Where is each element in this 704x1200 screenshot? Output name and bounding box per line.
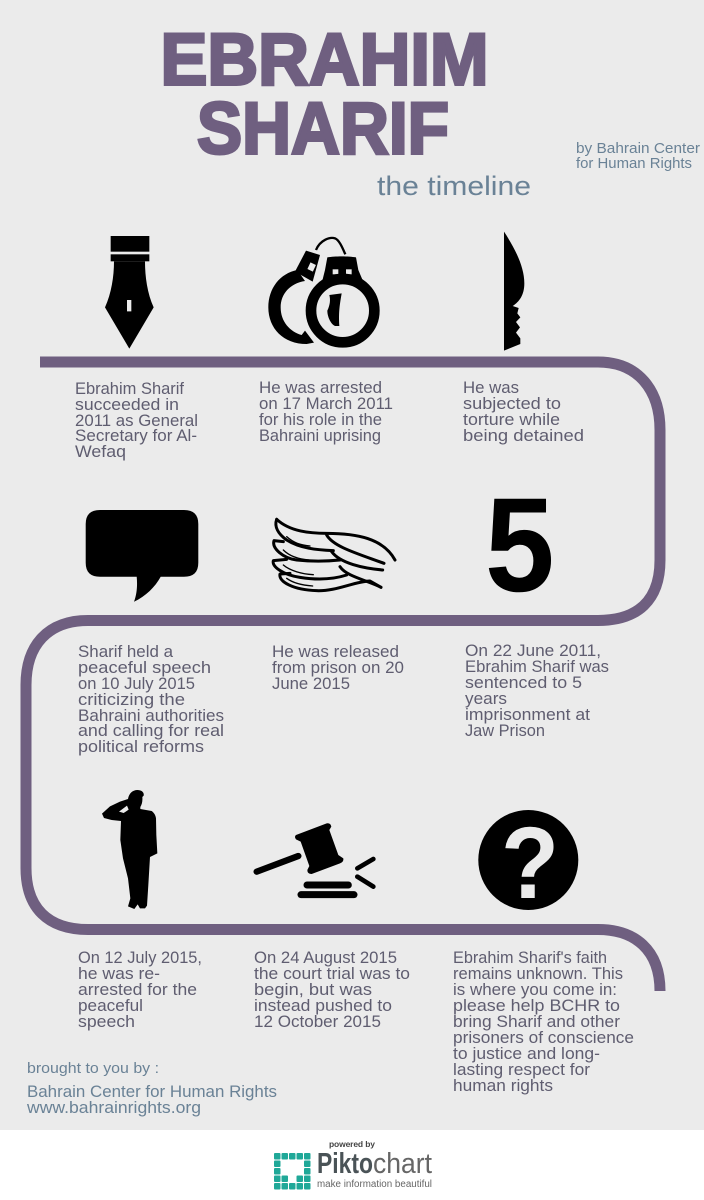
byline: for Human Rights: [576, 155, 692, 172]
text: succeeded as General Secretary: 2011 as General: [75, 411, 198, 430]
text: succeeded as General Secretary: succeeded in: [75, 395, 179, 414]
timeline path: [26, 362, 660, 991]
icon: fountain pen nib: [105, 236, 154, 349]
icon: knife: [504, 232, 524, 351]
text: call to action: is where you come in:: [453, 980, 617, 999]
piktochart wordmark: Pikto: [317, 1148, 373, 1180]
title: EBRAHIM: [160, 20, 488, 100]
text: peaceful speech: peaceful speech: [78, 658, 211, 677]
text: re-arrested: speech: [78, 1012, 135, 1031]
text: call to action: to justice and long-: [453, 1044, 600, 1063]
icon: handcuffs: [268, 238, 374, 344]
text: arrested: He was arrested: [259, 378, 382, 397]
text: call to action: please help BCHR to: [453, 996, 620, 1015]
text: call to action: lasting respect for: [453, 1060, 590, 1079]
footer credit: [26, 1060, 277, 1117]
text: peaceful speech: political reforms: [78, 737, 204, 756]
text: released: June 2015: [272, 674, 350, 693]
icon: number 5: 5: [485, 471, 554, 620]
text: sentenced: Jaw Prison: [465, 721, 545, 740]
title: SHARIF: [197, 88, 449, 170]
icon: question mark: ?: [501, 806, 559, 920]
icon: question mark: [478, 806, 578, 920]
text: court trial: begin, but was: [254, 980, 372, 999]
text: arrested: for his role in the: [259, 410, 382, 429]
text: call to action: prisoners of conscience: [453, 1028, 634, 1047]
text: court trial: 12 October 2015: [254, 1012, 381, 1031]
text: re-arrested: he was re-: [78, 964, 160, 983]
footer credit: www.bahrainrights.org: [26, 1099, 201, 1117]
text: court trial: On 24 August 2015: [254, 948, 397, 967]
text: torture: He was: [463, 378, 519, 397]
text: sentenced: On 22 June 2011,: [465, 641, 601, 660]
icon: speech bubble: [86, 510, 198, 602]
text: call to action: bring Sharif and other: [453, 1012, 620, 1031]
footer credit: Bahrain Center for Human Rights: [27, 1083, 277, 1101]
icon: gavel: [257, 823, 373, 895]
text: released: from prison on 20: [272, 658, 404, 677]
text: court trial: instead pushed to: [254, 996, 392, 1015]
text: call to action: human rights: [453, 1076, 553, 1095]
text: re-arrested: arrested for the: [78, 980, 197, 999]
text: sentenced: years: [465, 689, 507, 708]
piktochart logo mark: [274, 1153, 310, 1190]
text: torture: torture while: [463, 410, 560, 429]
text: call to action: Ebrahim Sharif's faith: [453, 948, 607, 967]
text: peaceful speech: criticizing the: [78, 690, 185, 709]
text: arrested: Bahraini uprising: [259, 426, 381, 445]
text: released: He was released: [272, 642, 399, 661]
text: peaceful speech: Sharif held a: [78, 642, 174, 661]
piktochart wordmark: chart: [373, 1148, 432, 1180]
piktochart tagline: make information beautiful: [317, 1179, 432, 1190]
byline: [576, 140, 700, 172]
text: sentenced: imprisonment at: [465, 705, 590, 724]
text: court trial: the court trial was to: [254, 964, 410, 983]
icon: wing: [273, 519, 395, 591]
text: succeeded as General Secretary: Ebrahim Sharif: [75, 379, 184, 398]
footer credit: brought to you by :: [27, 1060, 159, 1077]
text: call to action: remains unknown. This: [453, 964, 623, 983]
text: re-arrested: On 12 July 2015,: [78, 948, 202, 967]
text: peaceful speech: and calling for real: [78, 721, 224, 740]
panel: powered by band: [0, 1130, 704, 1200]
text: arrested: on 17 March 2011: [259, 394, 393, 413]
text: succeeded as General Secretary: Wefaq: [75, 442, 126, 461]
text: torture: subjected to: [463, 394, 561, 413]
text: peaceful speech: on 10 July 2015: [78, 674, 195, 693]
text: torture: being detained: [463, 426, 584, 445]
title: [160, 20, 488, 170]
text: sentenced: Ebrahim Sharif was: [465, 657, 609, 676]
icon: saluting soldier: [102, 790, 157, 909]
text: peaceful speech: Bahraini authorities: [78, 706, 224, 725]
powered by label: powered by: [329, 1139, 375, 1149]
subtitle: the timeline: the timeline: [377, 171, 531, 201]
text: re-arrested: peaceful: [78, 996, 143, 1015]
byline: by Bahrain Center: [576, 140, 700, 157]
text: succeeded as General Secretary: Secretary for Al-: [75, 426, 197, 445]
text: sentenced: sentenced to 5: [465, 673, 582, 692]
